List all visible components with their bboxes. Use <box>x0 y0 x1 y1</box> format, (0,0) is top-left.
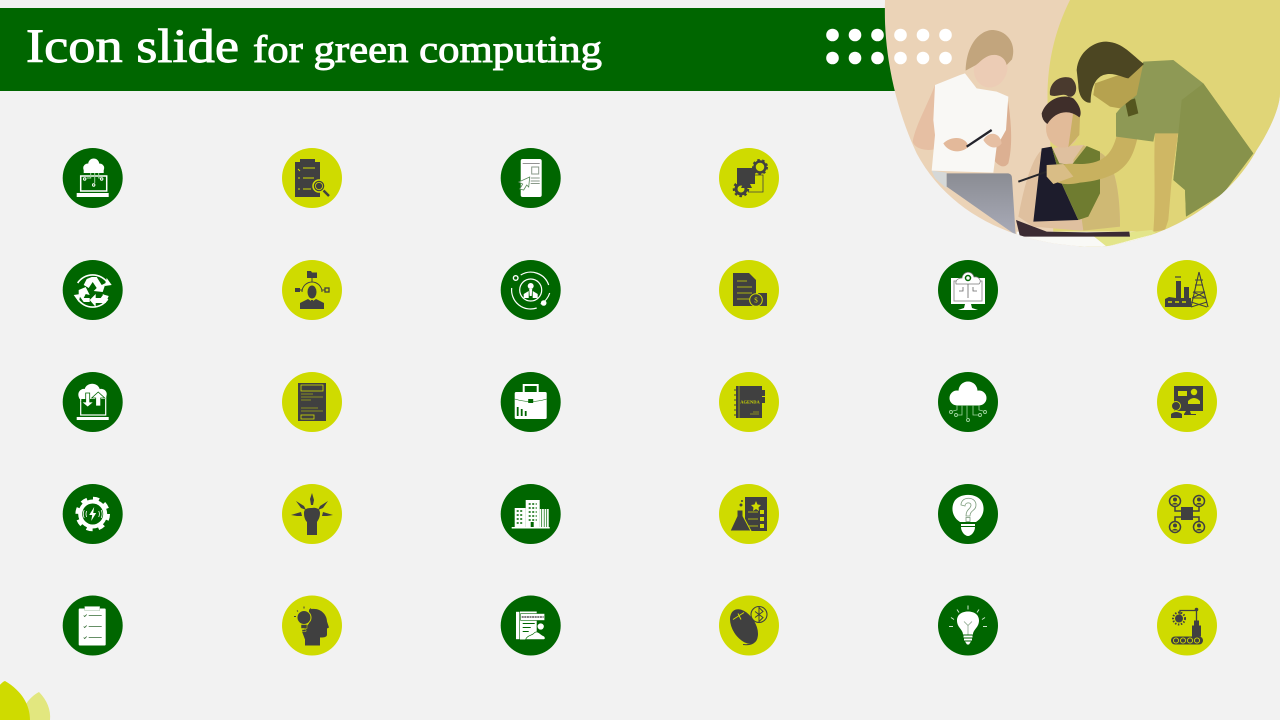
icon: cloud network <box>938 372 998 432</box>
icon: monitor with gears <box>719 148 779 208</box>
icon: document with coins <box>719 260 779 320</box>
icon: agenda notebook <box>719 372 779 432</box>
icon: video call <box>1157 372 1217 432</box>
icon: manager with connected items <box>282 260 342 320</box>
woman seated <box>1018 77 1120 231</box>
icon: office buildings <box>501 484 561 544</box>
icon: clipboard with magnifier <box>282 148 342 208</box>
icon: cloud monitor with gear <box>938 260 998 320</box>
icon: cloud connected laptop <box>63 148 123 208</box>
man leaning <box>1050 42 1253 232</box>
icon: gear with energy bolt <box>63 484 123 544</box>
icon: smartphone with cursor <box>501 148 561 208</box>
icon: recycling arrows <box>63 260 123 320</box>
header band <box>0 8 900 91</box>
icon: raised fist with bolts <box>282 484 342 544</box>
icon: agenda notebook: AGENDA <box>740 400 760 404</box>
laptop <box>947 173 1016 235</box>
photo: three colleagues around a laptop <box>883 0 1280 253</box>
icon: cloud upload and download laptop <box>63 372 123 432</box>
icon: document sheet <box>282 372 342 432</box>
icon: financial report with hand <box>501 596 561 656</box>
icon: briefcase with growth arrows <box>501 372 561 432</box>
icon: factory and power tower <box>1157 260 1217 320</box>
icon: document with coins: $ <box>754 296 758 304</box>
icon: lab flask and checklist <box>719 484 779 544</box>
title: Icon slide <box>26 20 239 73</box>
decorative leaves <box>0 681 50 720</box>
icon: person inside circular arrows <box>501 260 561 320</box>
decorative dots grid <box>826 29 952 64</box>
icon: checklist clipboard <box>63 596 123 656</box>
woman in white <box>913 30 1013 188</box>
icon: bluetooth mouse <box>719 596 779 656</box>
icon: glowing light bulb <box>938 596 998 656</box>
icon: people network around a box <box>1157 484 1217 544</box>
icon: light bulb with question mark <box>938 484 998 544</box>
icon: robot arm on conveyor <box>1157 596 1217 656</box>
title: for green computing <box>253 29 602 71</box>
icon: head with light bulb idea <box>282 596 342 656</box>
